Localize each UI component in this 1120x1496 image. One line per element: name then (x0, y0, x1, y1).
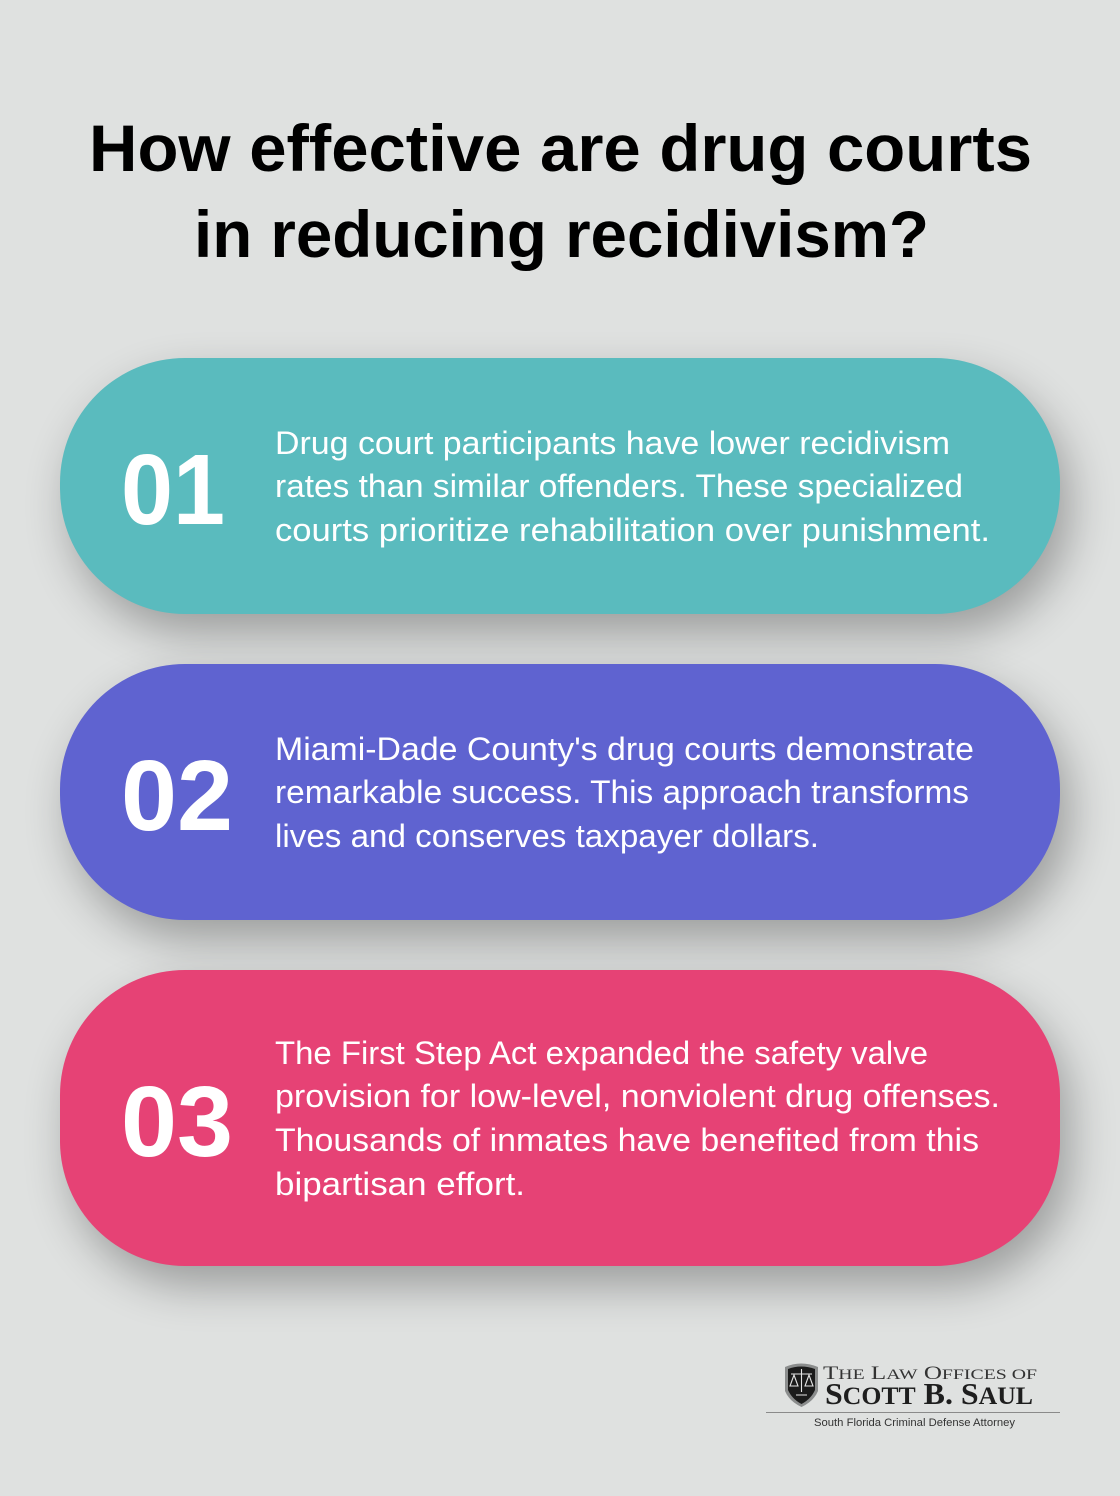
step 03 text: The First Step Act expanded the safety valve (275, 1035, 928, 1071)
panel: step 03 background (60, 970, 1060, 1266)
title: in reducing recidivism? (194, 197, 929, 271)
step 02 text: lives and conserves taxpayer dollars. (275, 818, 819, 854)
step 03 text: provision for low-level, nonviolent drug offenses. (275, 1078, 1000, 1114)
step 02 text: remarkable success. This approach transforms (275, 774, 969, 810)
step 03 text: bipartisan effort. (275, 1166, 525, 1202)
step 02 text (275, 731, 974, 854)
step 01 number: 01 (121, 434, 225, 546)
logo: law offices of Scott B. Saul (766, 1363, 1060, 1429)
step 01 text: Drug court participants have lower recidivism (275, 425, 950, 461)
step 03 text: Thousands of inmates have benefited from this (275, 1122, 979, 1158)
step 01 text: rates than similar offenders. These specialized (275, 468, 963, 504)
logo tagline: South Florida Criminal Defense Attorney (814, 1417, 1016, 1429)
step 01 text: courts prioritize rehabilitation over punishment. (275, 512, 990, 548)
logo line two: SCOTT B. SAUL (825, 1376, 1033, 1411)
panel: step 02 background (60, 664, 1060, 920)
step 02 number: 02 (121, 740, 233, 852)
title: How effective are drug courts (89, 111, 1032, 185)
title (89, 111, 1032, 271)
panel: step 01 background (60, 358, 1060, 614)
step 03 text (275, 1035, 1000, 1202)
step 03 number: 03 (121, 1066, 233, 1178)
icon: shield with scales (785, 1364, 818, 1407)
step 01 text (275, 425, 990, 548)
logo line one: THE L AW O FFICES OF (823, 1363, 1037, 1384)
step 02 text: Miami-Dade County's drug courts demonstrate (275, 731, 974, 767)
